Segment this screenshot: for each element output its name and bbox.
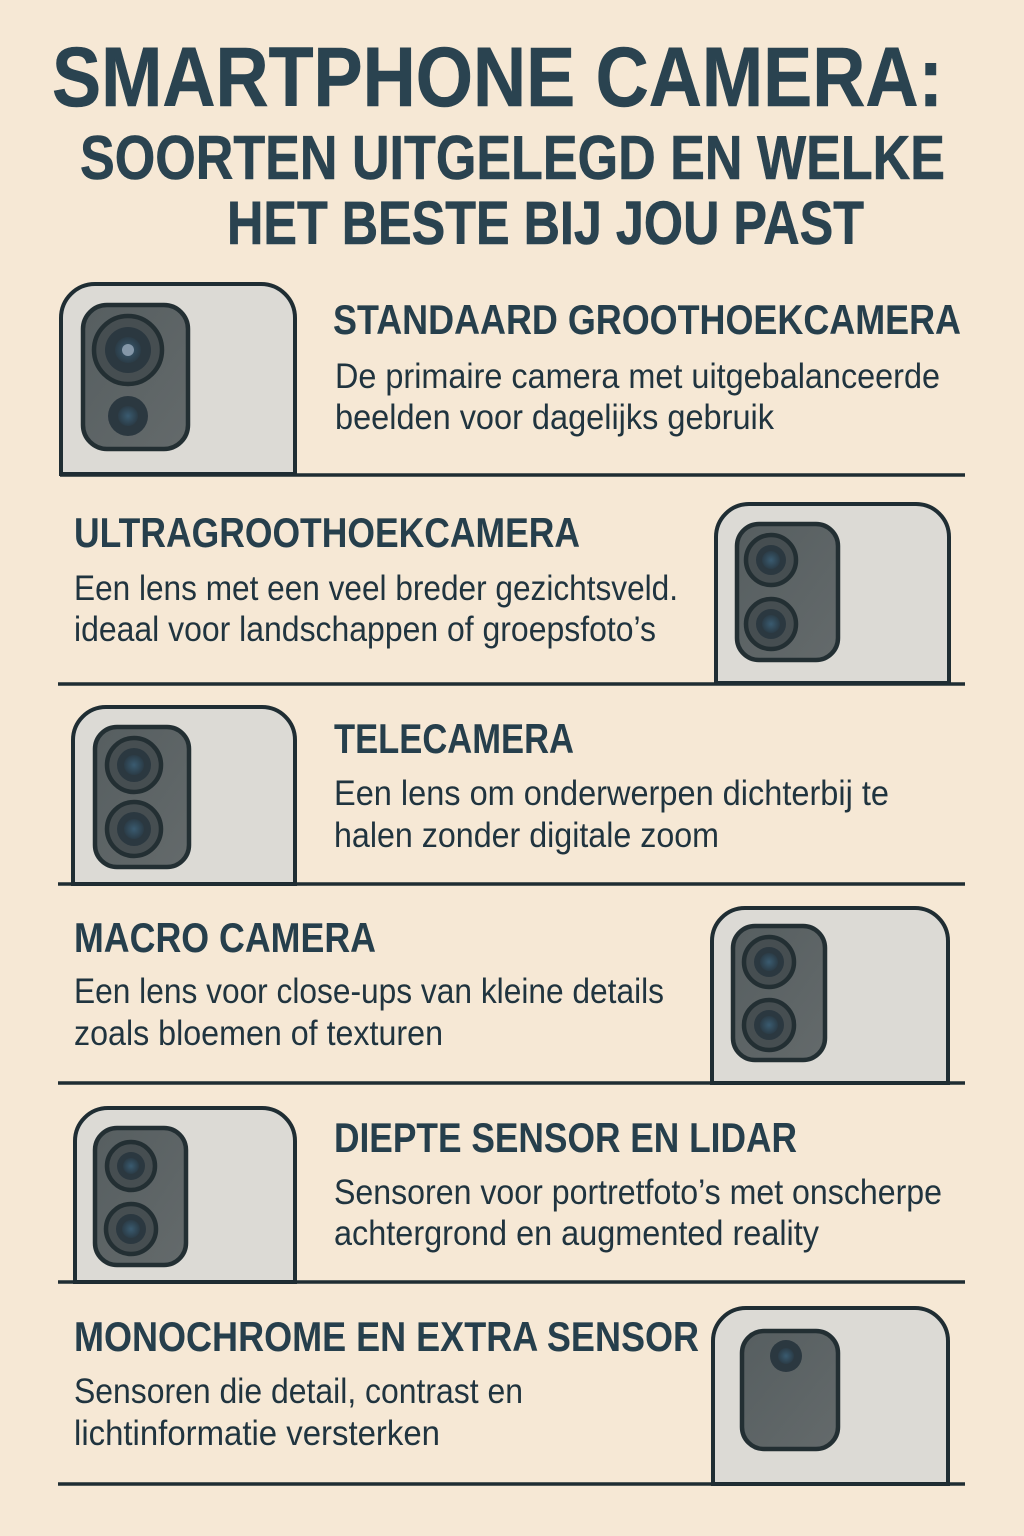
icon: phone with two lenses	[716, 504, 949, 683]
heading: TELECAMERA	[334, 715, 574, 762]
description	[74, 1372, 523, 1453]
panel: ultragroothoekcamera	[58, 504, 965, 684]
icon: phone with single lens	[713, 1308, 948, 1484]
panel: macro camera	[58, 908, 965, 1083]
heading: MONOCHROME EN EXTRA SENSOR	[74, 1313, 699, 1360]
icon: phone with two lenses	[712, 908, 948, 1083]
description: De primaire camera met uitgebalanceerde	[335, 357, 940, 396]
icon: phone with wide and small lens	[61, 284, 295, 474]
description: halen zonder digitale zoom	[334, 816, 719, 855]
description	[335, 357, 940, 437]
panel: monochrome en extra sensor	[58, 1308, 965, 1484]
title	[52, 30, 945, 257]
panel: telecamera	[58, 707, 965, 884]
panel: diepte sensor en lidar	[58, 1108, 965, 1282]
description	[334, 1173, 942, 1253]
heading: MACRO CAMERA	[74, 914, 376, 961]
icon: phone with two lenses	[73, 707, 295, 884]
description	[334, 774, 889, 855]
panel: standaard groothoekcamera	[60, 284, 965, 475]
description: Sensoren die detail, contrast en	[74, 1372, 523, 1411]
description: Een lens voor close-ups van kleine details	[74, 972, 664, 1011]
title: HET BESTE BIJ JOU PAST	[227, 189, 864, 257]
description	[74, 569, 678, 649]
description: ideaal voor landschappen of groepsfoto’s	[74, 610, 656, 649]
description: achtergrond en augmented reality	[334, 1214, 819, 1253]
description: beelden voor dagelijks gebruik	[335, 398, 774, 437]
heading: DIEPTE SENSOR EN LIDAR	[334, 1114, 797, 1161]
description	[74, 972, 664, 1053]
description: Sensoren voor portretfoto’s met onscherpe	[334, 1173, 942, 1212]
description: Een lens met een veel breder gezichtsveld.	[74, 569, 678, 608]
icon: phone with two lenses	[75, 1108, 295, 1282]
description: zoals bloemen of texturen	[74, 1014, 443, 1053]
description: Een lens om onderwerpen dichterbij te	[334, 774, 889, 813]
description: lichtinformatie versterken	[74, 1414, 440, 1453]
heading: ULTRAGROOTHOEKCAMERA	[74, 509, 580, 556]
